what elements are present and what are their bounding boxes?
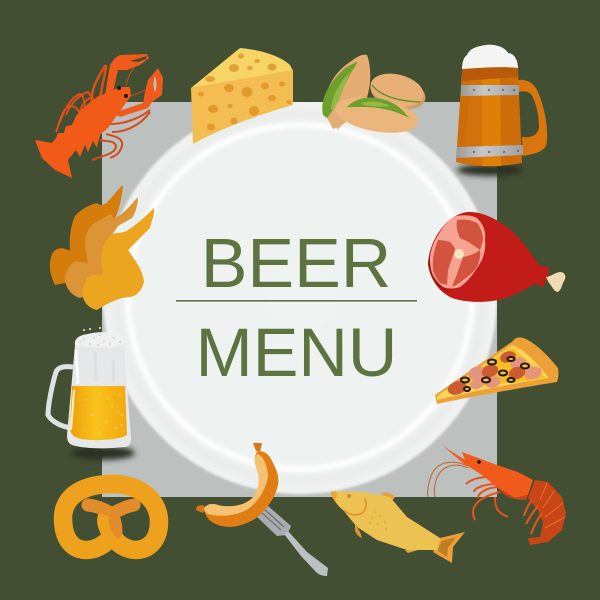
icon: crayfish	[35, 54, 163, 178]
icon: ham leg	[428, 212, 565, 302]
right pistachio	[367, 68, 429, 115]
beer foam	[75, 332, 124, 348]
icon: fork	[257, 505, 328, 576]
title: BEER: BEER	[201, 224, 391, 302]
foam	[462, 45, 518, 69]
icon: pizza slice	[435, 337, 558, 404]
icon: pretzel	[63, 484, 159, 550]
mug shadow	[457, 164, 523, 176]
title divider	[176, 300, 417, 302]
beer menu infographic	[35, 44, 566, 576]
crayfish lower claw	[113, 68, 163, 117]
icon: shrimp	[428, 446, 566, 545]
icon: fish	[331, 491, 465, 563]
upper band	[461, 85, 519, 96]
crayfish upper claw	[105, 54, 149, 95]
fish tail	[433, 532, 465, 563]
panel: grey napkin	[102, 102, 497, 497]
plate	[103, 100, 497, 494]
icon: pistachios	[322, 55, 429, 139]
icon: sausage	[196, 443, 278, 527]
left pistachio	[322, 55, 370, 129]
icon: glass beer mug	[48, 327, 135, 460]
ham bone	[546, 272, 565, 292]
icon: chicken	[50, 185, 154, 310]
shrimp head	[443, 446, 533, 498]
icon: wooden beer mug	[456, 45, 547, 176]
lower band	[456, 145, 523, 158]
shrimp tail	[528, 480, 566, 545]
bottom pistachio	[333, 91, 421, 139]
crayfish body and tail	[35, 87, 131, 178]
ham cut face	[430, 215, 485, 288]
title: MENU: MENU	[196, 314, 397, 391]
fish body	[331, 492, 440, 550]
icon: cheese wedge	[191, 48, 293, 144]
glass mug shadow	[71, 446, 135, 460]
